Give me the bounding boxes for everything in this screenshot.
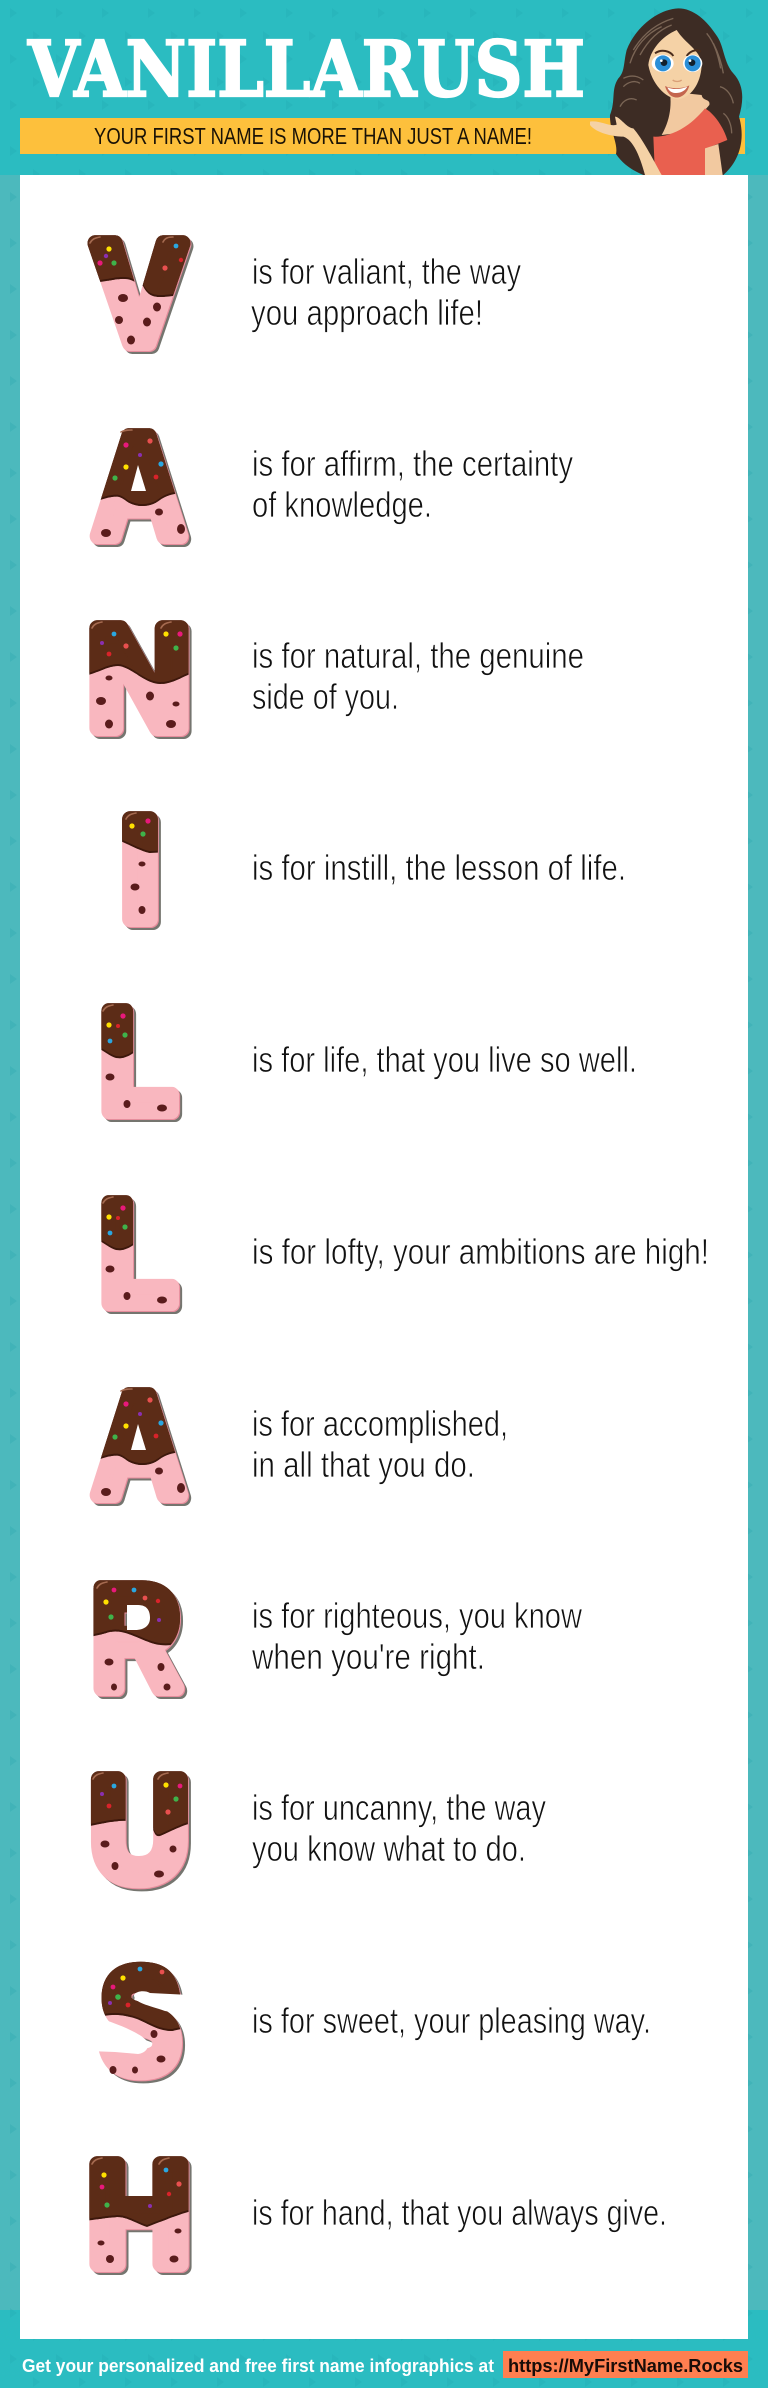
description A: of knowledge. [252,484,432,525]
description R: is for righteous, you know [252,1595,583,1636]
letter A: A [93,405,185,567]
sprinkles [108,1967,164,2007]
letter S: S [102,1942,181,2104]
letter A: A [93,1364,185,1526]
sprinkles [112,438,164,481]
letter L: L [103,1175,179,1337]
row N [89,620,192,739]
letter L [101,1195,182,1314]
letter A [90,428,192,547]
letter R: R [92,1558,180,1719]
letter R: R [95,1561,183,1722]
letter A: A [93,405,185,567]
title: VANILLARUSH [27,25,585,115]
letter U: U [90,1748,189,1910]
letter R: R [93,1559,181,1720]
description N: side of you. [252,676,399,717]
letter U: U [93,1751,192,1913]
letter I: I [123,792,163,953]
letter L: L [100,1172,176,1334]
description S: is for sweet, your pleasing way. [252,2000,651,2041]
description N: is for natural, the genuine [252,635,584,676]
banner: YOUR FIRST NAME IS MORE THAN JUST A NAME! [94,123,532,149]
letter R: R [92,1558,180,1719]
row A [90,428,192,547]
letter A: A [96,1367,188,1529]
chocolate chips [101,1468,185,1496]
chocolate chips [106,1266,167,1304]
letter V [88,235,194,354]
row A second [90,1387,192,1506]
row U [90,1771,191,1892]
footer: https://MyFirstName.Rocks [508,2356,743,2376]
chocolate chips [106,1074,167,1112]
letter N: N [88,598,190,759]
description A second: is for accomplished, [252,1403,508,1444]
letter V: V [94,211,184,374]
letter N: N [89,599,191,760]
letter L: L [103,983,179,1145]
letter N: N [88,598,190,759]
row S [99,1962,186,2084]
letter U: U [91,1749,190,1911]
letter A: A [93,1364,185,1526]
sprinkles [112,1397,164,1440]
description V: is for valiant, the way [252,251,521,292]
row L [101,1003,182,1122]
letter A: A [93,1364,185,1526]
letter U: U [90,1748,189,1910]
description U: is for uncanny, the way [252,1787,546,1828]
chocolate chips [98,2228,182,2263]
letter H: H [88,2134,190,2295]
letter L: L [100,1172,176,1334]
letter A [90,1387,192,1506]
letter L: L [100,980,176,1142]
row V [88,235,194,354]
description H: is for hand, that you always give. [252,2192,667,2233]
description A second: in all that you do. [252,1444,475,1485]
letter A: A [96,408,188,570]
letter V: V [94,211,184,374]
letter L: L [100,980,176,1142]
description V: you approach life! [251,292,483,333]
chocolate chips [130,862,146,914]
sprinkles [97,244,183,271]
chocolate chips [100,1840,176,1878]
sprinkles [129,818,151,837]
sprinkles [100,631,183,656]
letter R [93,1580,188,1699]
chocolate chips [115,294,161,344]
description R: when you're right. [251,1636,485,1677]
letter R: R [92,1558,180,1719]
letter N: N [91,601,193,762]
letter L: L [101,1173,177,1335]
sprinkles [103,1588,161,1622]
letter A: A [93,405,185,567]
description U: you know what to do. [252,1828,526,1869]
sprinkles [100,2168,182,2208]
letter L [101,1003,182,1122]
letter H: H [89,2135,191,2296]
banner [20,118,745,154]
row H [89,2156,192,2275]
footer [22,2351,748,2378]
letter L: L [101,981,177,1143]
letter A: A [94,1365,186,1527]
sprinkles [106,1013,128,1043]
chocolate chips [104,1658,170,1690]
letter L: L [100,1172,176,1334]
letter V: V [95,212,185,375]
letter V: V [97,214,187,377]
description A: is for affirm, the certainty [252,443,573,484]
footer: Get your personalized and free first name infographics at [22,2356,494,2376]
description I: is for instill, the lesson of life. [252,847,626,888]
letter U: U [90,1748,189,1910]
letter H: H [88,2134,190,2295]
letter S: S [101,1941,180,2103]
letter H: H [91,2137,193,2298]
row I [122,811,161,930]
sprinkles [106,1205,128,1235]
row R [93,1580,188,1699]
letter I: I [120,789,160,950]
letter I: I [120,789,160,950]
row L second [101,1195,182,1314]
letter A: A [94,406,186,568]
letter S: S [101,1941,180,2103]
description L: is for life, that you live so well. [252,1039,637,1080]
letter N: N [88,598,190,759]
letter H: H [88,2134,190,2295]
chocolate chips [101,508,185,537]
letter S: S [101,1941,180,2103]
chocolate chips [110,2030,166,2074]
letter S: S [104,1944,183,2106]
sprinkles [100,1782,182,1815]
chocolate chips [96,676,180,728]
letter I: I [121,790,161,951]
character illustration [590,8,742,175]
letter I: I [120,789,160,950]
letter L: L [100,980,176,1142]
letter V: V [94,211,184,374]
